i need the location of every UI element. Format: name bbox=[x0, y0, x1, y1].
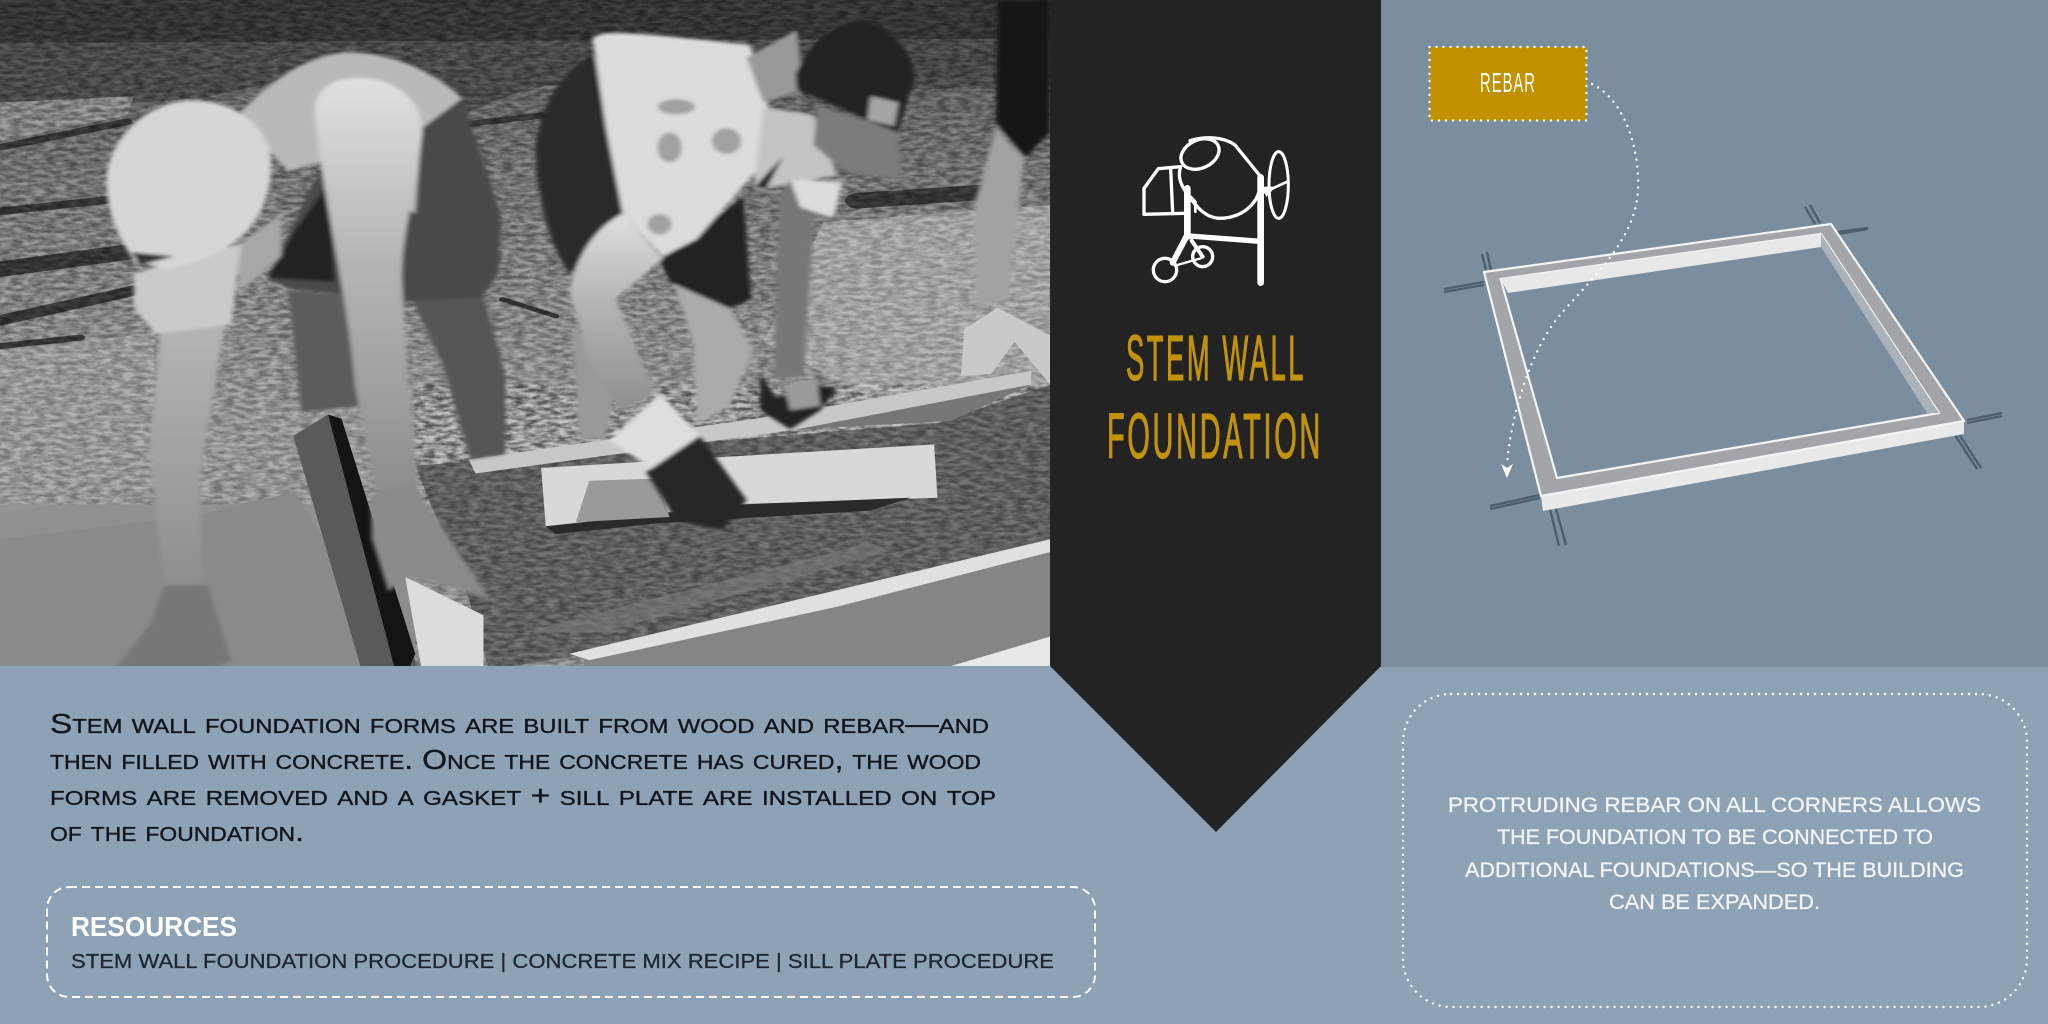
title bbox=[1107, 322, 1323, 472]
panel: black pennant banner: STEM WALL bbox=[1126, 322, 1306, 394]
frame inner far wall bbox=[1501, 234, 1821, 293]
panel: upper right diagram background bbox=[1381, 0, 2048, 667]
callout: protruding rebar note bbox=[1403, 694, 2027, 1007]
frame outer walls bbox=[1541, 421, 1964, 511]
panel: black pennant banner bbox=[1050, 0, 1381, 832]
callout: protruding rebar note: CAN BE EXPANDED. bbox=[1609, 891, 1820, 914]
callout: protruding rebar note: THE FOUNDATION TO BE CONNECTED TO bbox=[1497, 826, 1933, 849]
text block: description: Stem wall foundation forms are built from wood and rebar—and bbox=[50, 708, 989, 739]
photo ground bbox=[0, 0, 1050, 670]
panel: black pennant banner: FOUNDATION bbox=[1107, 400, 1323, 472]
diagram: foundation frame with rebar bbox=[1444, 205, 2002, 546]
frame top face bbox=[1484, 224, 1964, 496]
wet concrete bbox=[415, 385, 1050, 670]
third person leg bbox=[974, 0, 1050, 308]
photo: workers levelling concrete in a stem wall form bbox=[0, 0, 1050, 670]
panel: resources bbox=[47, 887, 1095, 997]
text block: description bbox=[50, 708, 996, 847]
label: rebar bbox=[1430, 47, 1586, 120]
left person bbox=[107, 52, 506, 670]
photo noise texture on ground bbox=[0, 0, 1050, 504]
icon: cement mixer bbox=[1144, 133, 1288, 283]
arrow: rebar label to corner bbox=[1501, 84, 1638, 478]
resources links: STEM WALL FOUNDATION PROCEDURE | CONCRETE MIX RECIPE | SILL PLATE PROCEDURE bbox=[71, 951, 1054, 973]
concrete slab lower left bbox=[246, 492, 302, 504]
form boards bbox=[293, 308, 1050, 670]
text block: description: forms are removed and a gasket + sill plate are installed on top bbox=[50, 780, 996, 811]
background: lower band bbox=[0, 666, 2048, 1024]
right person bbox=[536, 21, 914, 530]
callout: protruding rebar note: ADDITIONAL FOUNDATIONS—SO THE BUILDING bbox=[1465, 859, 1964, 882]
text block: description: then filled with concrete. Once the concrete has cured, the wood bbox=[50, 744, 981, 775]
text block: description: of the foundation. bbox=[50, 816, 304, 847]
callout: protruding rebar note: PROTRUDING REBAR ON ALL CORNERS ALLOWS bbox=[1448, 794, 1981, 817]
label: rebar: REBAR bbox=[1480, 67, 1536, 98]
frame inner right wall bbox=[1821, 234, 1939, 413]
resources heading: RESOURCES bbox=[71, 911, 237, 942]
rebar stubs bbox=[1444, 205, 2002, 546]
